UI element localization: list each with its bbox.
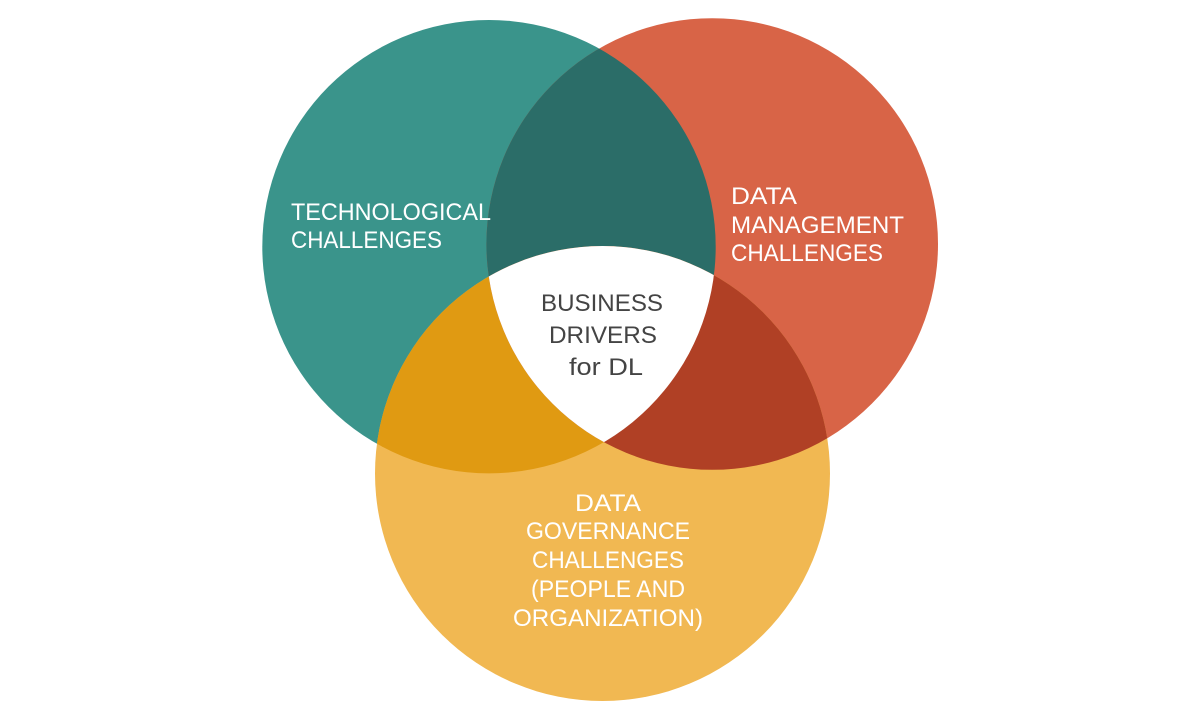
label: data governance challenges: DATA — [575, 490, 641, 517]
label: data governance challenges: CHALLENGES — [532, 547, 684, 574]
venn diagram — [262, 18, 938, 701]
overlap: technological and data management — [486, 48, 716, 276]
label: data management challenges: CHALLENGES — [731, 240, 883, 267]
circle: data governance challenges — [375, 246, 830, 701]
center: intersection of all three — [488, 246, 714, 442]
label: business drivers for DL: BUSINESS — [541, 290, 663, 317]
overlap: data management and data governance — [488, 246, 828, 470]
label: data governance challenges — [513, 490, 703, 632]
label: technological challenges — [291, 199, 491, 254]
label: data governance challenges: (PEOPLE AND — [531, 576, 685, 603]
label: technological challenges: TECHNOLOGICAL — [291, 199, 491, 226]
label: data governance challenges: GOVERNANCE — [526, 518, 690, 545]
label: data governance challenges: ORGANIZATION) — [513, 605, 703, 632]
circle: data management challenges — [486, 18, 938, 470]
label: data management challenges: DATA — [731, 183, 797, 210]
label: business drivers for DL: DRIVERS — [549, 322, 657, 349]
label: data management challenges — [731, 183, 904, 267]
label: business drivers for DL — [541, 290, 663, 381]
overlap: technological and data governance — [377, 246, 714, 474]
label: data management challenges: MANAGEMENT — [731, 212, 904, 239]
circle: technological challenges — [262, 20, 716, 473]
label: business drivers for DL: for DL — [569, 354, 643, 381]
label: technological challenges: CHALLENGES — [291, 227, 442, 254]
